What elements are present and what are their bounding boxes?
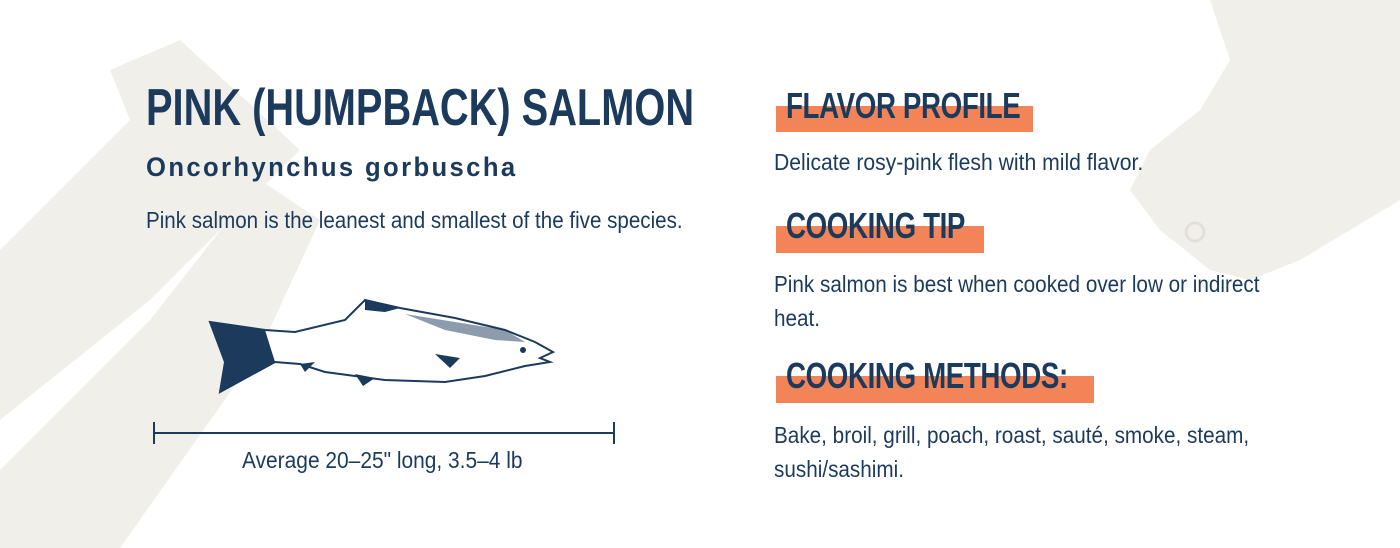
intro text: Pink salmon is the leanest and smallest of the five species. (146, 207, 683, 233)
size caption: Average 20–25" long, 3.5–4 lb (242, 447, 523, 473)
subtitle: scientific name: Oncorhynchus gorbuscha (146, 152, 518, 182)
text: cooking methods: Bake, broil, grill, poach, roast, sauté, smoke, steam, sushi/sashimi. (774, 422, 1249, 482)
icon: salmon illustration (208, 298, 556, 394)
text: flavor: Delicate rosy-pink flesh with mild flavor. (774, 149, 1143, 175)
title: PINK (HUMPBACK) SALMON (146, 79, 694, 137)
heading: cooking tip: COOKING TIP (786, 205, 965, 246)
text: cooking tip: Pink salmon is best when cooked over low or indirect heat. (774, 271, 1260, 331)
heading: cooking methods: COOKING METHODS: (786, 355, 1068, 396)
scale bar (153, 422, 615, 444)
heading: flavor profile: FLAVOR PROFILE (786, 85, 1020, 126)
